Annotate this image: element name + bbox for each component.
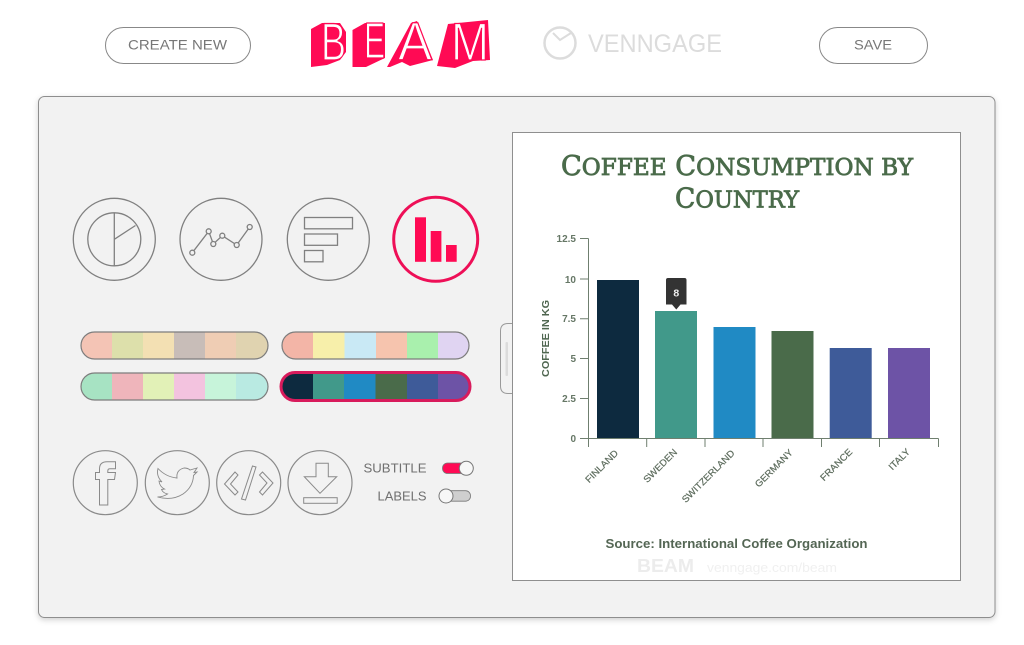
icon: horizontal bar chart	[287, 198, 369, 280]
icon: line chart	[180, 198, 262, 280]
toggle: labels: LABELS	[378, 490, 426, 504]
bars	[597, 280, 930, 438]
logo: Venngage	[544, 28, 722, 58]
tooltip: 8	[673, 288, 679, 300]
toggle: subtitle	[364, 461, 473, 476]
x axis labels: GERMANY	[753, 447, 796, 490]
logo: Beam: M	[451, 13, 489, 72]
y axis: 7.5	[562, 314, 576, 325]
button: save	[820, 28, 928, 64]
icon: download	[288, 451, 352, 515]
palette: mint pink pastel	[81, 373, 268, 400]
icon: facebook	[73, 451, 137, 515]
drawer handle	[500, 324, 513, 394]
x axis labels: FINLAND	[583, 448, 621, 486]
x axis labels: SWITZERLAND	[680, 448, 737, 505]
panel: chart card	[512, 132, 960, 580]
button: create new: CREATE NEW	[128, 36, 228, 52]
button: create new	[106, 28, 250, 64]
bar chart	[541, 234, 938, 505]
icon: column chart selected	[394, 197, 478, 281]
y axis	[557, 234, 938, 447]
logo: Beam: B	[321, 13, 346, 72]
y axis: 0	[570, 434, 576, 445]
logo: Beam: A	[398, 12, 432, 72]
y axis: 2.5	[562, 394, 576, 405]
y axis: 12.5	[557, 234, 576, 245]
chart title: COUNTRY	[675, 183, 800, 214]
icon: embed code	[217, 451, 281, 515]
palette: warm pastel	[81, 332, 268, 359]
logo: Venngage: VENNGAGE	[588, 30, 722, 58]
palette: bright pastel	[282, 332, 470, 359]
watermark: BEAM	[637, 556, 694, 576]
watermark	[637, 556, 837, 576]
x axis labels	[583, 446, 913, 505]
icon: twitter	[145, 451, 209, 515]
x axis labels: ITALY	[887, 446, 913, 473]
y axis: 10	[565, 275, 576, 286]
x axis labels: SWEDEN	[642, 447, 680, 485]
button: save: SAVE	[854, 36, 892, 52]
chart title	[561, 151, 914, 214]
y axis title: COFFEE IN KG	[541, 300, 552, 377]
tooltip	[666, 278, 686, 310]
palette: selected dark	[281, 372, 471, 400]
icon: pie chart	[73, 198, 155, 280]
x axis labels: FRANCE	[818, 447, 855, 484]
toggle: subtitle: SUBTITLE	[364, 462, 426, 476]
logo: Beam: E	[364, 12, 385, 69]
toggle: labels	[378, 489, 470, 504]
watermark: venngage.com/beam	[707, 560, 837, 575]
panel: editor	[38, 96, 995, 618]
y axis: 5	[570, 354, 576, 365]
chart title: COFFEE CONSUMPTION BY	[561, 151, 914, 182]
source text: Source: International Coffee Organization	[606, 537, 868, 551]
logo: Beam	[311, 12, 490, 72]
